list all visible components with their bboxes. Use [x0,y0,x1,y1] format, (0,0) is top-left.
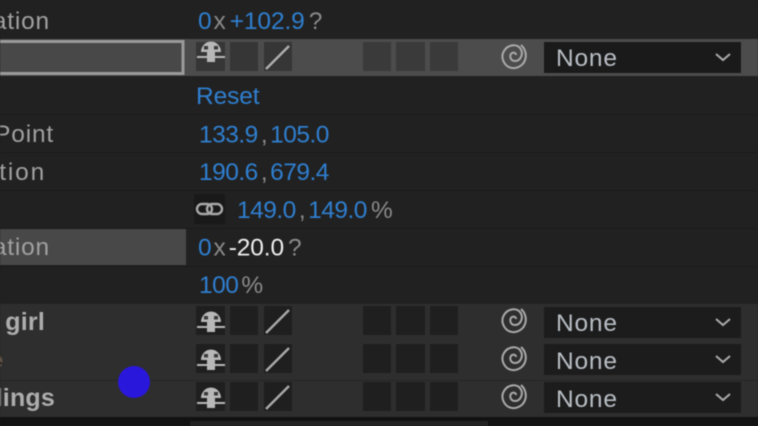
row: rotation highlighted [0,229,302,265]
row: rotation highlighted: 0x-20.0? [198,234,302,262]
bottom edge bar [0,417,758,426]
row: selected layer [0,39,758,76]
layer name field [0,42,183,74]
parent dropdown [544,42,741,73]
layer switches [196,42,458,71]
icon: parent spiral [502,45,526,68]
row: anchor point: 133.9,105.0 [199,122,329,148]
row: rotation top [0,8,322,35]
layer switches [196,306,458,335]
row: reset: Reset [196,83,260,110]
icon: parent spiral [502,385,526,408]
parent dropdown: None [556,348,618,375]
row: position [0,159,329,186]
layer switches [196,382,458,411]
parent dropdown: None [556,45,618,72]
row: opacity: 100% [199,272,263,299]
layer row: lings [0,380,758,417]
row: position: tion [0,159,46,186]
layer row: girl: girl [5,308,45,336]
parent dropdown [544,344,741,375]
icon: parent spiral [502,309,526,332]
layer switches [196,344,458,373]
parent dropdown: None [556,310,618,337]
row: rotation top: 0x+102.9? [198,8,322,35]
layer row: girl [0,304,758,342]
row: scale: 149.0,149.0% [237,197,392,224]
parent dropdown [544,307,741,338]
icon: link [194,194,225,224]
parent dropdown: None [556,386,618,413]
row separators [0,114,758,266]
blue cursor dot [118,366,150,398]
row: anchor point [0,121,329,148]
parent dropdown [544,382,741,413]
row: position: 190.6,679.4 [199,159,329,186]
icon: parent spiral [502,347,526,370]
layer row: second [0,342,758,380]
